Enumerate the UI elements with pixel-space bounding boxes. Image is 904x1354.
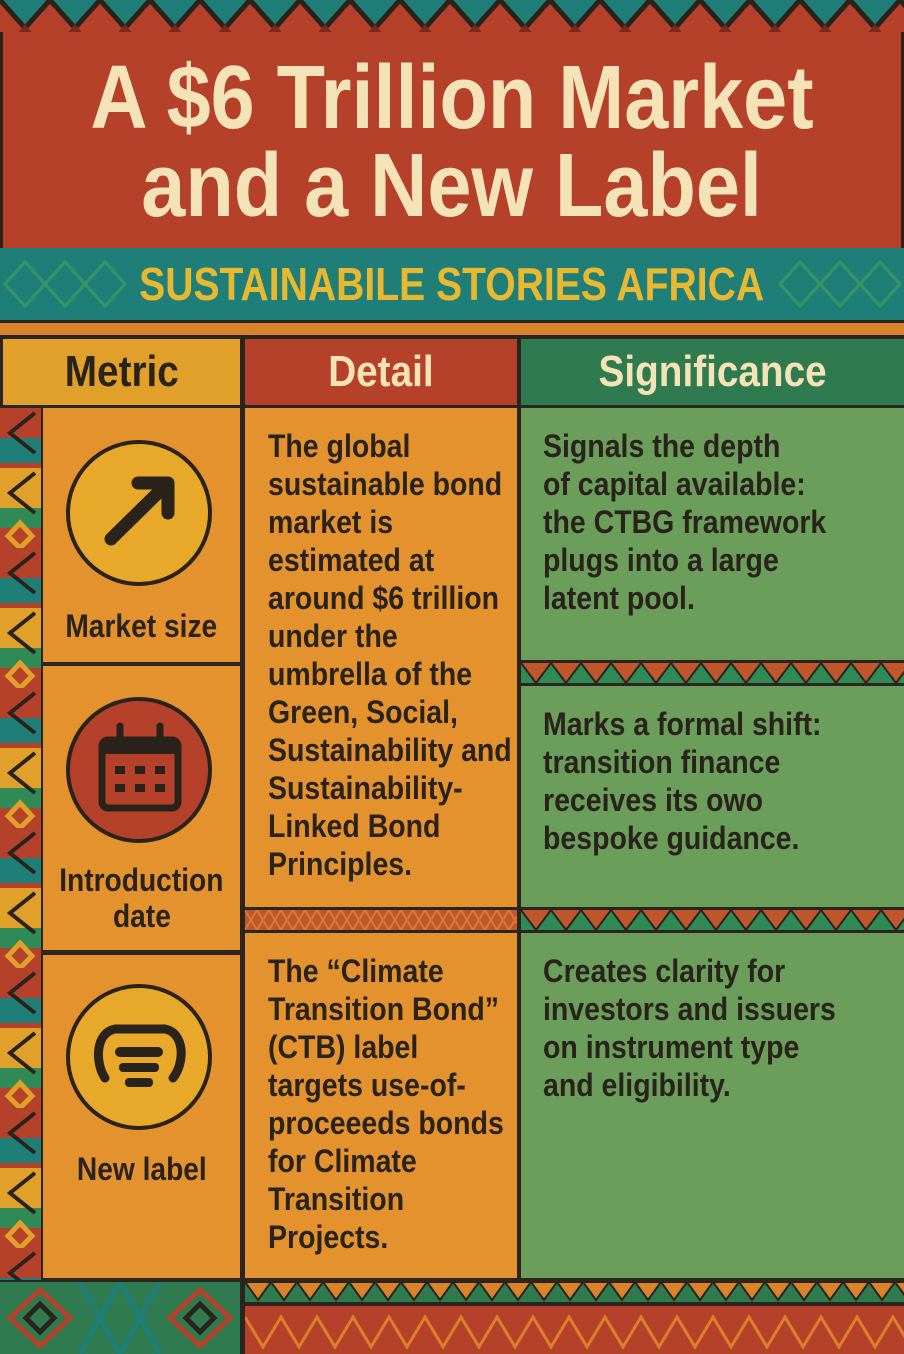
significance cell 1: plugs into a large [543,542,779,578]
detail cell 1: Green, Social, [268,694,458,730]
significance cell 3: Creates clarity for [543,953,785,989]
detail cell 2: Transition [268,1181,404,1217]
header: Metric: Metric [64,347,179,396]
icon: label [66,984,212,1130]
detail pattern strip [245,910,517,930]
detail cell 1: umbrella of the [268,656,472,692]
metric cell: new label [43,955,240,1278]
detail cell 2: The “Climate [268,953,444,989]
header: Significance [521,339,904,405]
detail cell 2: (CTB) label [268,1029,418,1065]
significance cell 2 [521,686,904,907]
detail cell 1: around $6 trillion [268,580,499,616]
detail cell 1: Sustainability- [268,770,463,806]
subtitle band [0,248,904,320]
detail cell 2: for Climate [268,1143,417,1179]
detail cell 2: Transition Bond” [268,991,499,1027]
bottom left pattern [0,1282,240,1354]
detail cell 1: The global [268,428,410,464]
significance cell 1 [521,408,904,660]
significance cell 1: Signals the depth [543,428,780,464]
detail cell 1 [245,408,517,907]
metric cell: introduction date: date [113,898,170,934]
title: and a New Label [142,136,762,236]
title: A $6 Trillion Market [90,48,814,148]
detail cell 1: Principles. [268,846,412,882]
detail cell 1: market is [268,504,393,540]
metric cell: market size [43,408,240,662]
top zigzag band [0,0,904,32]
significance cell 1: the CTBG framework [543,504,826,540]
header: Detail: Detail [328,347,434,396]
bottom right zigzag [245,1283,904,1354]
orange strip [0,323,904,335]
icon: calendar [66,697,212,843]
detail cell 2 [245,933,517,1278]
metric cell: market size: Market size [66,608,217,644]
significance cell 3 [521,933,904,1278]
significance cell 3: on instrument type [543,1029,799,1065]
detail cell 2: Projects. [268,1219,388,1255]
detail cell 1: under the [268,618,398,654]
significance cell 1: of capital available: [543,466,806,502]
significance cell 1: latent pool. [543,580,695,616]
detail cell 1: estimated at [268,542,434,578]
significance cell 2: Marks a formal shift: [543,706,822,742]
significance cell 3: investors and issuers [543,991,836,1027]
detail cell 1: Linked Bond [268,808,440,844]
detail cell 2: proceeeds bonds [268,1105,504,1141]
detail cell 1: Sustainability and [268,732,512,768]
header: Significance: Significance [598,347,827,396]
metric cell: introduction date [43,666,240,950]
significance cell 2: transition finance [543,744,780,780]
detail cell 2: targets use-of- [268,1067,466,1103]
icon: arrow [66,440,212,586]
left pattern strip [0,408,41,1280]
metric cell: introduction date: Introduction [59,862,224,898]
header: Detail [245,339,517,405]
metric cell: new label: New label [77,1151,206,1187]
subtitle band: SUSTAINABILE STORIES AFRICA [140,258,764,310]
header: Metric [3,339,240,405]
significance cell 3: and eligibility. [543,1067,731,1103]
detail cell 1: sustainable bond [268,466,502,502]
significance cell 2: receives its owo [543,782,763,818]
title [0,32,904,248]
significance cell 2: bespoke guidance. [543,820,799,856]
